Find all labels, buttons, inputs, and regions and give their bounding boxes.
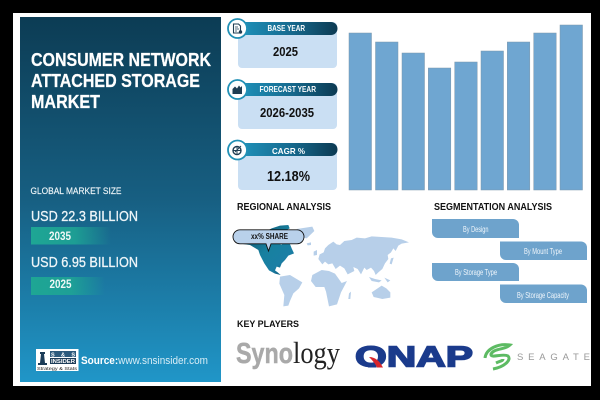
segment: by mount type: By Mount Type [524, 246, 562, 256]
segment: by design: By Design [463, 224, 489, 234]
icon: document [234, 24, 242, 34]
card: cagr [228, 140, 338, 190]
card: base year: 2025 [273, 44, 298, 59]
source logo: INSIDER [51, 359, 75, 365]
source logo [36, 349, 78, 371]
bar chart [349, 25, 582, 190]
source text: Source:www.snsinsider.com [81, 355, 208, 367]
callout: share [233, 230, 304, 251]
logo: synology: logy [293, 335, 340, 370]
logo: qnap: QNAP [355, 342, 473, 374]
world map [238, 225, 409, 306]
segment: by storage type [432, 263, 519, 281]
2025 market value: USD 6.95 BILLION [31, 254, 138, 271]
heading: regional analysis: REGIONAL ANALYSIS [237, 202, 331, 213]
card: forecast year: 2026-2035 [260, 105, 314, 120]
title: MARKET [31, 92, 100, 112]
title: CONSUMER NETWORK [31, 50, 211, 70]
title [31, 50, 211, 112]
segment: by mount type [500, 242, 587, 260]
segment: by design [432, 219, 519, 238]
logo: synology [236, 335, 340, 370]
icon: chart [232, 86, 242, 94]
card: cagr: CAGR % [272, 146, 305, 156]
card: forecast year: FORECAST YEAR [260, 85, 316, 94]
segment: by storage type: By Storage Type [455, 267, 497, 277]
card: cagr: 12.18% [267, 168, 310, 185]
segment: by storage capacity [500, 284, 587, 303]
2035 market value: 2035 [49, 231, 72, 243]
2025 market value: 2025 [50, 279, 72, 291]
heading: key players: KEY PLAYERS [237, 319, 299, 330]
source logo: Strategy & Stats [37, 366, 78, 371]
2025 market value [31, 254, 138, 295]
card: forecast year [228, 80, 338, 129]
2035 market value [31, 208, 138, 244]
heading: segmentation analysis: SEGMENTATION ANALYSIS [434, 202, 552, 213]
card: base year: BASE YEAR [268, 24, 305, 33]
card: base year [228, 19, 338, 68]
source logo: S & S [51, 352, 75, 358]
callout: share: xx% SHARE [251, 232, 289, 241]
2035 market value: USD 22.3 BILLION [31, 208, 138, 225]
icon: growth globe [233, 146, 241, 154]
segment: by storage capacity: By Storage Capacity [517, 290, 570, 300]
logo: seagate [485, 345, 590, 369]
logo: synology: Syno [236, 338, 293, 370]
title: ATTACHED STORAGE [31, 71, 200, 91]
global market size label: GLOBAL MARKET SIZE [30, 186, 122, 196]
logo: seagate: SEAGATE [517, 352, 590, 363]
panel: market summary [20, 17, 221, 382]
region highlight: north america [238, 225, 294, 275]
logo: qnap [353, 342, 473, 376]
